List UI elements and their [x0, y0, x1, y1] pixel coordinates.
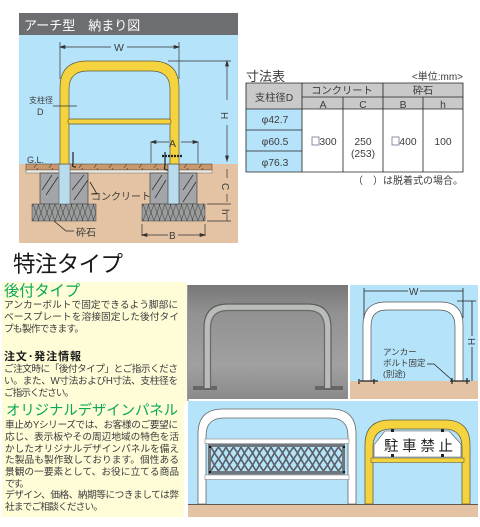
dimensions table: コンクリート	[311, 85, 373, 97]
crushed stone beds	[32, 204, 205, 221]
dimensions table: B	[400, 100, 407, 111]
original design panel description: 社までご相談ください。	[5, 500, 103, 513]
yellow arch with no parking sign: 駐車禁止	[384, 438, 453, 455]
dimensions table: φ76.3	[262, 158, 289, 169]
dimensions table: A	[320, 100, 327, 111]
dimensions table: φ42.7	[262, 115, 289, 126]
dimensions table: C	[359, 100, 367, 111]
original design panel description: です。	[5, 478, 29, 490]
diagram labels: 砕石	[76, 227, 96, 239]
heading: original design panel: オリジナルデザインパネル	[6, 401, 178, 419]
diagram labels: コンクリート	[91, 191, 151, 203]
white arch with lattice panel	[198, 409, 356, 504]
dimensions table: 砕石	[413, 85, 433, 97]
diagram labels	[27, 42, 230, 242]
photo: steel arch bollard	[188, 285, 348, 399]
original design panel description: 車止めYシリーズでは、お客様のご要望に	[5, 418, 178, 431]
dimension lines	[53, 42, 231, 236]
order information description: い。また、W寸法およびH寸法、支柱径を	[4, 374, 178, 387]
dimensions table: 250	[354, 137, 372, 148]
concrete and gravel leader lines	[54, 182, 97, 231]
original design panel description: デザイン、価格、納期等につきましては弊	[5, 488, 179, 501]
order information description	[4, 362, 178, 399]
labels: ボルト固定	[383, 358, 426, 368]
retrofit description: アンカーボルトで固定できるよう脚部に	[4, 298, 178, 311]
yellow arch bollard	[60, 61, 179, 164]
panel: retrofit dimension diagram	[350, 285, 478, 399]
dimensions table	[246, 69, 463, 187]
dimensions table: 100	[434, 137, 452, 148]
original design panel description: た製品も製作致しております。個性ある	[5, 453, 179, 466]
dimensions table: 300	[319, 137, 337, 148]
anchor bolts	[72, 152, 183, 170]
original design panel description: 応じ、表示板やその周辺地域の特色を活	[5, 430, 179, 443]
labels: W	[409, 287, 419, 298]
retrofit description	[4, 298, 179, 335]
order information description: ご指示ください。	[4, 386, 74, 399]
retrofit description: ベースプレートを溶接固定した後付タイ	[4, 310, 179, 323]
diagram labels: C	[219, 183, 230, 190]
dimension lines and base plates	[359, 288, 476, 384]
section title: 特注タイプ	[13, 252, 123, 277]
retrofit description: プも製作できます。	[4, 322, 84, 335]
dimensions table: φ60.5	[262, 137, 289, 148]
diagram labels: h	[219, 209, 230, 215]
unit note: <単位:mm>	[412, 70, 463, 83]
diagram labels: G.L.	[27, 155, 44, 165]
post sleeves	[59, 164, 179, 204]
labels: (別途)	[383, 369, 406, 379]
ground surface layers	[26, 164, 212, 173]
labels	[383, 287, 476, 379]
panel: arch installation diagram	[19, 13, 238, 243]
diagram labels: W	[114, 42, 124, 54]
panel: custom type text	[2, 282, 188, 517]
diagram labels: H	[218, 112, 229, 119]
dimensions table: 支柱径D	[255, 91, 293, 104]
white arch	[363, 302, 463, 381]
dimensions table: 400	[399, 137, 417, 148]
original design panel description: 景観の一要素として、お役に立てる商品	[5, 465, 179, 478]
table title: 寸法表	[246, 69, 285, 84]
labels: H	[465, 338, 476, 345]
diagram heading: アーチ型 納まり図	[24, 18, 140, 33]
heading: order information: 注文･発注情報	[4, 349, 81, 363]
diagram labels: D	[37, 107, 44, 117]
yellow arch with no parking sign	[365, 420, 470, 504]
panel: original design panels	[188, 401, 478, 517]
order information description: ご注文時に「後付タイプ」とご指示くださ	[4, 362, 178, 375]
original design panel description	[5, 418, 179, 513]
heading: retrofit type: 後付タイプ	[4, 283, 81, 300]
dimensions table: h	[440, 100, 446, 111]
diagram labels: A	[169, 138, 176, 150]
labels: アンカー	[383, 347, 417, 357]
diagram labels: B	[169, 231, 176, 242]
table footnote: （ ）は脱着式の場合。	[353, 174, 463, 187]
diagram labels: 支柱径	[29, 95, 53, 105]
original design panel description: かしたオリジナルデザインパネルを備え	[5, 442, 179, 455]
dimensions table: (253)	[351, 149, 375, 160]
concrete foundations	[40, 173, 197, 204]
diagram heading	[19, 13, 238, 35]
